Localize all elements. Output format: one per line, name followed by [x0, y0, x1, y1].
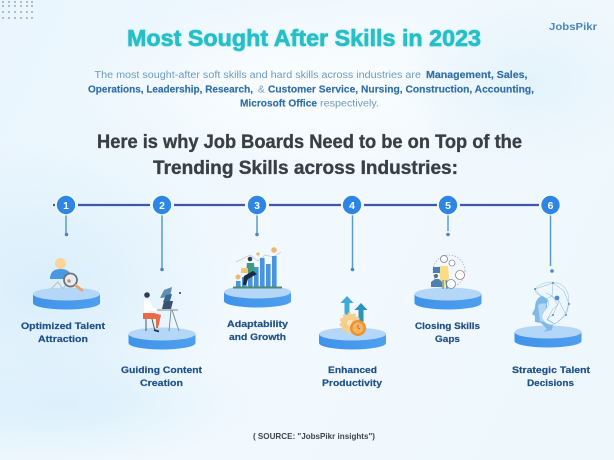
- intro paragraph: Customer Service, Nursing, Construction, Accounting,: [268, 84, 534, 96]
- step 2: [121, 194, 203, 389]
- label 5: Gaps: [435, 334, 460, 345]
- icon: productivity gear and arrows: [340, 296, 368, 336]
- timeline connector: [53, 204, 539, 206]
- platform 2: [128, 328, 196, 349]
- intro paragraph: [88, 70, 534, 110]
- icon: skills team: [431, 255, 465, 289]
- intro paragraph: Microsoft Office: [240, 98, 317, 110]
- intro paragraph: respectively.: [320, 98, 379, 110]
- platform 5: [414, 288, 482, 310]
- subheading: Here is why Job Boards Need to be on Top of the: [97, 132, 522, 153]
- subheading: Trending Skills across Industries:: [153, 158, 458, 179]
- label 3: and Growth: [229, 332, 286, 343]
- platform 4: [319, 328, 386, 350]
- label 5: [415, 321, 480, 345]
- step 5: [414, 194, 482, 345]
- stem 1: [65, 212, 68, 236]
- number badge 4: [342, 194, 362, 216]
- logo: JobsPikr: JobsPikr: [549, 21, 597, 33]
- decorative dot grid: [2, 1, 33, 19]
- number badge 1: 1: [63, 200, 69, 212]
- number badge 2: 2: [159, 200, 165, 212]
- title: Most Sought After Skills in 2023: [127, 25, 481, 51]
- label 5: Closing Skills: [415, 321, 480, 332]
- number badge 4: 4: [349, 200, 355, 212]
- step 1: [21, 194, 106, 345]
- label 4: Enhanced: [328, 365, 377, 376]
- title: Most Sought After Skills in 2023: [127, 25, 481, 51]
- step 6: [512, 194, 591, 389]
- intro paragraph: The most sought-after soft skills and hard skills across industries are: [94, 70, 421, 81]
- number badge 3: [246, 194, 268, 216]
- label 1: Attraction: [38, 334, 88, 345]
- label 1: Optimized Talent: [21, 321, 106, 332]
- stem 5: [446, 212, 450, 236]
- icon: content creator at desk: [143, 287, 181, 332]
- stem 6: [550, 212, 554, 273]
- label 4: Productivity: [322, 378, 383, 389]
- label 6: Strategic Talent: [512, 365, 591, 376]
- stem 3: [255, 212, 259, 236]
- label 6: Decisions: [527, 378, 574, 389]
- number badge 5: [438, 194, 458, 216]
- subheading: [97, 132, 522, 179]
- label 1: [21, 321, 106, 345]
- label 3: [227, 319, 289, 343]
- platform 6: [514, 326, 582, 347]
- number badge 6: [540, 194, 561, 216]
- intro paragraph: Operations, Leadership, Research,: [88, 84, 253, 96]
- number badge 5: 5: [445, 200, 451, 212]
- label 2: Guiding Content: [121, 365, 203, 376]
- intro paragraph: Management, Sales,: [426, 70, 528, 81]
- number badge 6: 6: [548, 200, 554, 212]
- icon: growth bar chart: [233, 247, 282, 288]
- icon: talent search: [50, 258, 83, 291]
- intro paragraph: &: [258, 84, 265, 96]
- step 4: [319, 194, 386, 389]
- step 3: [224, 194, 291, 343]
- platform 3: [224, 286, 291, 308]
- platform 1: [33, 288, 100, 310]
- number badge 3: 3: [254, 200, 260, 212]
- number badge 1: [56, 194, 76, 216]
- stem 2: [160, 212, 164, 271]
- label 3: Adaptability: [227, 319, 289, 330]
- stem 4: [351, 212, 354, 271]
- label 4: [322, 365, 383, 389]
- label 2: [121, 365, 203, 389]
- label 2: Creation: [140, 378, 183, 389]
- label 6: [512, 365, 591, 389]
- source note: ( SOURCE: "JobsPikr insights"): [253, 431, 375, 441]
- number badge 2: [152, 194, 172, 216]
- icon: AI head network: [532, 282, 570, 332]
